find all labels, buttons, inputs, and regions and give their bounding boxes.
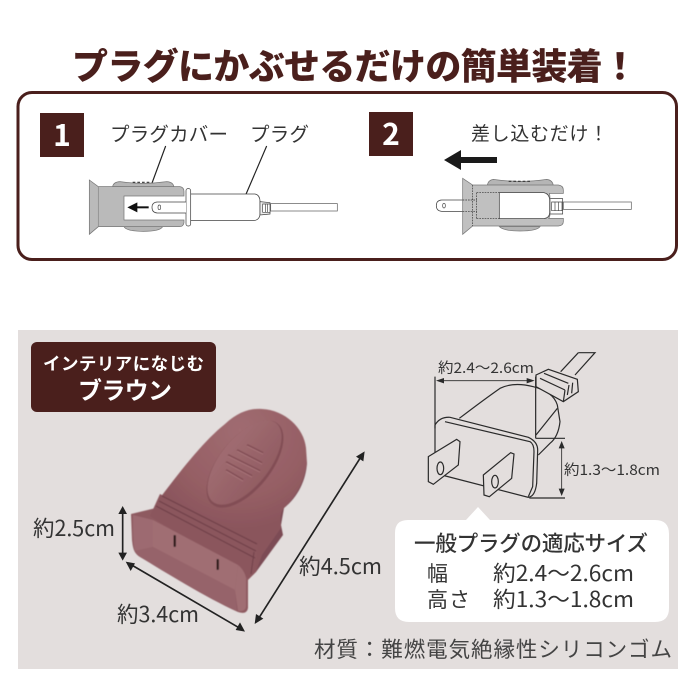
- callout: compatible plug size: [395, 507, 669, 622]
- label: width 3.4cm: 約3.4cm: [117, 598, 199, 629]
- grip ridges: [226, 445, 263, 480]
- colour badge: [31, 342, 216, 412]
- panel: product details: [18, 330, 678, 669]
- step 2 number badge: [369, 110, 413, 156]
- step 1 diagram: [89, 146, 337, 234]
- step 1 label: plug cover: プラグカバー: [110, 118, 228, 147]
- colour badge: ブラウン: [78, 371, 172, 406]
- pressed oval: [192, 407, 298, 521]
- body: [160, 409, 307, 580]
- step 2 number badge: 2: [382, 110, 400, 154]
- step 2 arrow: [444, 150, 497, 170]
- dimension arrows on product: [118, 451, 365, 632]
- plug line drawing: [428, 353, 595, 498]
- panel: steps: [18, 92, 676, 260]
- flange silhouette: [131, 507, 257, 613]
- rib band: [150, 494, 258, 578]
- material note: 材質：難燃電気絶縁性シリコンゴム: [314, 633, 672, 664]
- callout: compatible plug size: 約1.3～1.8cm: [493, 583, 634, 614]
- step 1 number badge: [40, 111, 84, 157]
- callout: compatible plug size: 一般プラグの適応サイズ: [414, 527, 648, 558]
- plug slots: [174, 535, 176, 547]
- rear clip: [240, 440, 307, 572]
- step 1 number badge: 1: [53, 111, 71, 155]
- title: プラグにかぶせるだけの簡単装着！: [72, 38, 638, 90]
- inner right wall: [235, 565, 246, 611]
- label: height 2.5cm: 約2.5cm: [33, 512, 115, 543]
- label: plug width: 約2.4～2.6cm: [438, 357, 534, 378]
- inner back wall: [153, 520, 238, 590]
- step 1 label: plug: プラグ: [250, 118, 309, 147]
- callout: compatible plug size: 約2.4～2.6cm: [493, 557, 634, 588]
- step 2 label: 差し込むだけ！: [471, 119, 608, 146]
- label: length 4.5cm: 約4.5cm: [299, 550, 382, 581]
- callout: compatible plug size: 幅: [427, 558, 448, 588]
- callout: compatible plug size: 高さ: [427, 584, 470, 614]
- colour badge: インテリアになじむ: [43, 351, 204, 376]
- step 2 diagram: [436, 178, 631, 234]
- inner floor: [135, 547, 237, 611]
- inner left wall: [133, 515, 153, 551]
- product photo: plug cover: [131, 407, 307, 613]
- label: plug height: 約1.3～1.8cm: [564, 459, 660, 480]
